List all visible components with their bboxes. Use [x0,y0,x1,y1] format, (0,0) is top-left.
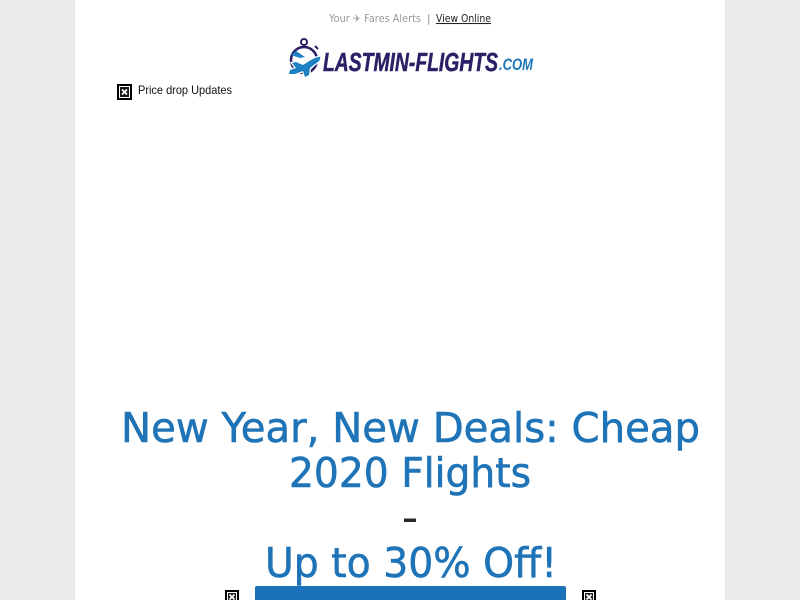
logo: Lastmin-Flights.com: .COM [499,55,534,74]
icon: stopwatch with plane [289,39,320,77]
logo: Lastmin-Flights.com: LASTMIN-FLIGHTS [323,47,498,77]
headline: 2020 Flights [289,449,531,497]
logo: Lastmin-Flights.com [289,39,534,77]
icon: broken image placeholder [118,85,131,99]
headline: New Year, New Deals: Cheap [121,404,700,452]
preheader: fares alerts and view online link: View Online [436,13,491,25]
image alt text: Price drop Updates [138,83,232,97]
headline [121,404,700,497]
call to action button [255,586,566,600]
preheader: fares alerts and view online link: | [427,13,431,25]
icon: broken image left of button [226,591,238,600]
subheadline: discount: Up to 30% Off! [265,539,557,587]
dash separator [404,518,416,522]
preheader: fares alerts and view online link [328,13,491,25]
icon: broken image right of button [583,591,595,600]
preheader: fares alerts and view online link: Your ✈ Fares Alerts [328,13,421,25]
